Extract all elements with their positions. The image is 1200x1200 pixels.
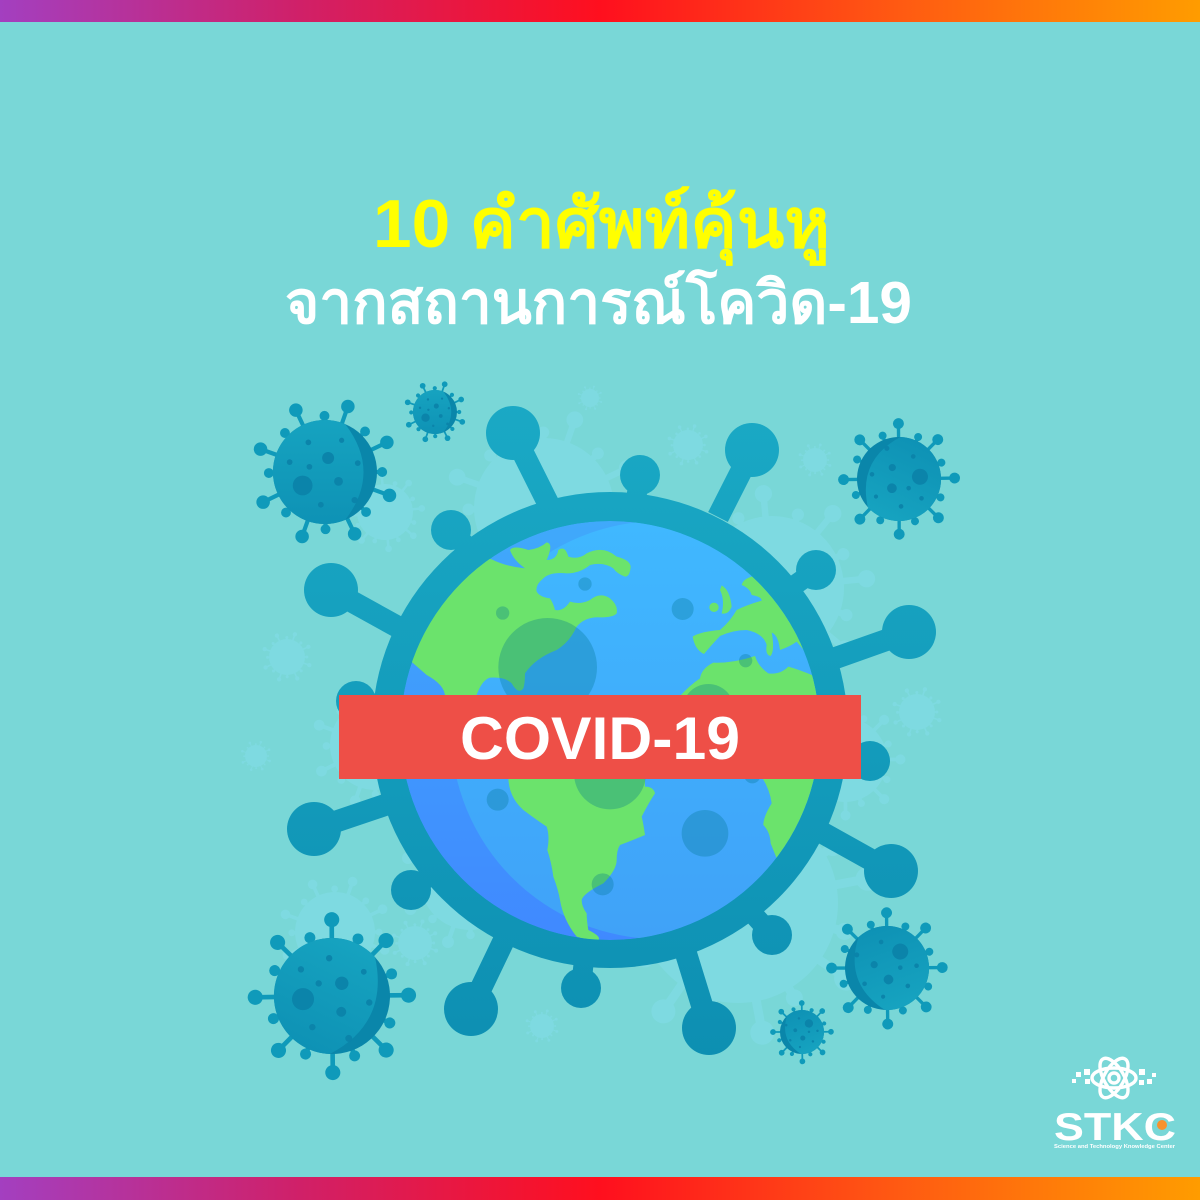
- title: [285, 186, 912, 336]
- globe: [404, 521, 816, 940]
- europe and asia: [692, 576, 804, 656]
- logo orange dot: [1157, 1120, 1167, 1130]
- south america: [508, 777, 655, 940]
- continents and spots: [390, 542, 833, 940]
- STKC logo: [1054, 1054, 1176, 1150]
- virus top small: [405, 381, 465, 442]
- faint background viruses: [241, 386, 941, 1070]
- virus bottom right: [813, 894, 961, 1043]
- virus top left large: [254, 400, 396, 543]
- logo pixel squares: [1072, 1069, 1156, 1085]
- north america: [390, 542, 631, 697]
- red banner: [339, 695, 861, 779]
- title line 2: จากสถานการณ์โควิด-19: [285, 268, 912, 336]
- spots: [487, 577, 761, 895]
- logo tagline: Science and Technology Knowledge Center: [1054, 1144, 1176, 1150]
- africa upper: [681, 656, 816, 695]
- virus bottom left: [226, 889, 438, 1102]
- top gradient bar: [0, 0, 1200, 22]
- main virus spikes and ring: [287, 406, 936, 1055]
- ocean highlight: [457, 522, 816, 938]
- virus top right: [822, 403, 975, 556]
- greenland sliver: [720, 585, 732, 614]
- virus bottom small: [763, 993, 841, 1071]
- ocean shadow: [400, 521, 820, 940]
- africa lower: [763, 779, 814, 858]
- banner label: COVID-19: [460, 705, 740, 772]
- logo wordmark: STKC: [1054, 1106, 1176, 1149]
- bottom gradient bar: [0, 1177, 1200, 1200]
- iceland: [709, 603, 719, 612]
- title line 1: 10 คำศัพท์คุ้นหู: [373, 186, 830, 267]
- logo atom icon: [1092, 1054, 1136, 1102]
